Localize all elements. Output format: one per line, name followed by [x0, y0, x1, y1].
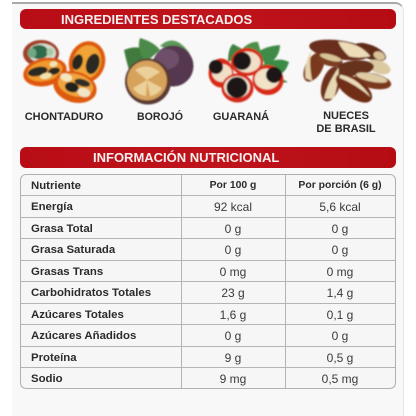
- icon: nueces de brasil: [298, 36, 393, 108]
- icon: borojo: [124, 38, 194, 104]
- row: energia: 92 kcal: [214, 200, 252, 214]
- row: azucares totales: Azúcares Totales: [31, 309, 124, 321]
- row: sodio: 9 mg: [220, 372, 246, 386]
- row: grasas trans: 0 mg: [327, 265, 353, 279]
- label: nueces de brasil: DE BRASIL: [316, 123, 376, 135]
- row: proteina: [21, 347, 395, 368]
- row: grasa saturada: Grasa Saturada: [31, 244, 115, 256]
- row: azucares anadidos: [21, 325, 395, 347]
- row: carbohidratos: 1,4 g: [327, 286, 353, 300]
- label: chontaduro: CHONTADURO: [25, 111, 103, 123]
- row: azucares totales: 0,1 g: [327, 308, 353, 322]
- row: header: [21, 175, 395, 196]
- row: grasas trans: Grasas Trans: [31, 266, 103, 278]
- row: energia: 5,6 kcal: [319, 200, 361, 214]
- row: carbohidratos: [21, 282, 395, 304]
- icon: guarana: [208, 42, 289, 102]
- row: azucares totales: 1,6 g: [220, 308, 246, 322]
- banner: informacion nutricional: INFORMACIÓN NUTRICIONAL: [93, 150, 279, 165]
- row: sodio: 0,5 mg: [322, 372, 358, 386]
- row: sodio: [31, 372, 358, 386]
- row: grasa saturada: 0 g: [225, 243, 241, 257]
- row: energia: [21, 196, 395, 218]
- label: nueces de brasil: NUECES: [323, 110, 369, 122]
- banner: informacion nutricional: [20, 147, 396, 168]
- fruit illustrations: [22, 37, 392, 106]
- row: grasas trans: 0 mg: [220, 265, 246, 279]
- row: header: Por 100 g: [210, 180, 256, 191]
- row: sodio: Sodio: [31, 373, 63, 385]
- row: energia: Energía: [31, 201, 73, 213]
- row: grasa total: 0 g: [225, 222, 241, 236]
- row: grasa total: Grasa Total: [31, 223, 93, 235]
- row: grasa total: [21, 218, 395, 239]
- label: nueces de brasil: [316, 110, 376, 135]
- row: proteina: Proteína: [31, 352, 77, 364]
- nutrition table: [20, 174, 396, 389]
- icon: chontaduro: [21, 36, 111, 108]
- row: azucares anadidos: 0 g: [332, 329, 348, 343]
- row: azucares totales: [21, 304, 395, 325]
- row: header: Nutriente: [31, 180, 81, 192]
- row: grasa saturada: [21, 239, 395, 261]
- row: carbohidratos: Carbohidratos Totales: [31, 287, 151, 299]
- row: header: Por porción (6 g): [298, 180, 382, 191]
- row: proteina: 9 g: [225, 351, 241, 365]
- row: grasas trans: [21, 261, 395, 282]
- row: azucares anadidos: Azúcares Añadidos: [31, 330, 136, 342]
- banner: ingredientes destacados: INGREDIENTES DESTACADOS: [61, 12, 252, 27]
- row: carbohidratos: 23 g: [221, 286, 245, 300]
- label: borojo: BOROJÓ: [137, 111, 183, 123]
- banner: ingredientes destacados: [20, 9, 396, 29]
- row: proteina: 0,5 g: [327, 351, 353, 365]
- row: grasa saturada: 0 g: [332, 243, 348, 257]
- label: guarana: GUARANÁ: [213, 111, 269, 123]
- row: azucares anadidos: 0 g: [225, 329, 241, 343]
- row: grasa total: 0 g: [332, 222, 348, 236]
